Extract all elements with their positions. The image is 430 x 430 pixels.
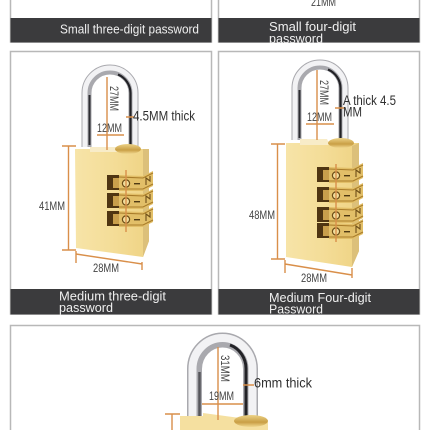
dimension lines: [165, 347, 254, 430]
dimension label: 6mm thick: 6mm thick: [254, 376, 312, 390]
dimension label: 12MM: 12MM: [307, 110, 332, 124]
caption bar: small four-digit: password: [269, 31, 323, 46]
caption bar: medium three-digit: [10, 288, 212, 315]
caption bar: medium three-digit: Medium three-digit: [59, 288, 166, 304]
dimension label: 4.5MM thick: 4.5MM thick: [133, 108, 195, 124]
shackle: [85, 68, 135, 147]
dimension label: 27MM: 27MM: [317, 80, 331, 105]
dimension label: 19MM: 19MM: [209, 389, 234, 403]
caption bar: medium three-digit: password: [59, 300, 113, 315]
shackle: [192, 338, 252, 420]
caption bar: medium four-digit: Password: [269, 302, 323, 316]
caption bar: medium four-digit: Medium Four-digit: [269, 290, 371, 305]
padlock: medium three-digit: [75, 68, 153, 257]
shackle: [295, 63, 345, 140]
caption bar: small four-digit: [218, 18, 420, 42]
dimension label: A thick 4.5 MM: [343, 93, 396, 120]
caption bar: small three-digit: Small three-digit password: [60, 22, 199, 36]
dimension label: 28MM: 28MM: [93, 261, 119, 275]
dimension label: A thick 4.5 MM: A thick 4.5: [343, 93, 396, 108]
dimension label: 31MM: 31MM: [218, 355, 232, 382]
padlock: large: [180, 338, 268, 430]
dimension lines: [271, 70, 352, 278]
panel: large padlock: [10, 326, 420, 430]
caption bar: small four-digit: Small four-digit: [269, 19, 356, 34]
padlock: medium four-digit: [286, 63, 363, 267]
dimension label: 41MM: 41MM: [39, 199, 65, 213]
caption bar: small three-digit: [10, 18, 212, 42]
dimension label: 12MM: 12MM: [97, 121, 122, 135]
panel: small four-digit password: [218, 0, 420, 46]
panel: medium three-digit password: [10, 52, 212, 315]
panel: medium four-digit password: [218, 52, 420, 316]
panel: small three-digit password: [10, 0, 212, 42]
caption bar: medium four-digit: [218, 289, 420, 316]
dimension label: 28MM: 28MM: [301, 271, 327, 285]
dimension label: 27MM: 27MM: [107, 86, 121, 111]
dimension label: A thick 4.5 MM: MM: [343, 104, 362, 120]
dimension label: 48MM: 48MM: [249, 208, 275, 222]
dimension lines: [62, 77, 142, 270]
